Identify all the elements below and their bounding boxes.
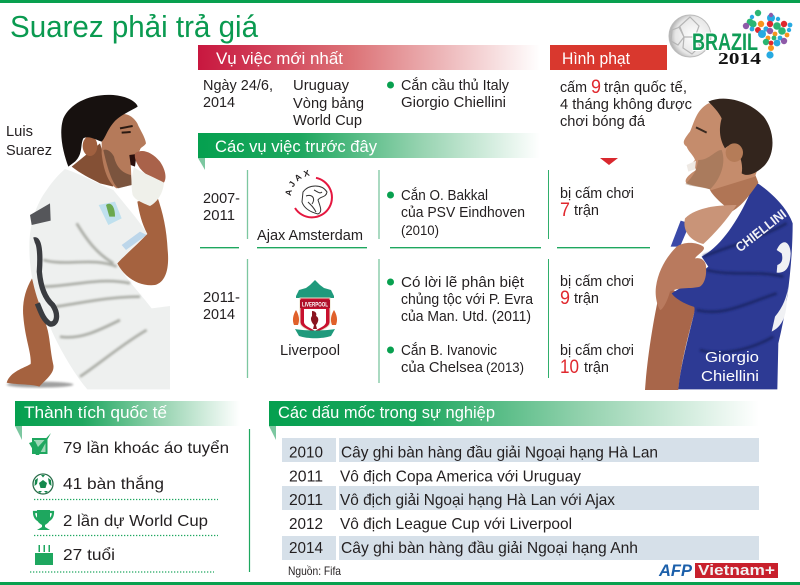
logo: Brazil 2014: 2014 (718, 49, 762, 68)
penalty: 7 matches (560, 185, 634, 221)
row: 2011 Ajax: 2011 (289, 492, 323, 509)
top green bar (0, 0, 800, 3)
row: 2011-2014 years: 2011- (203, 289, 240, 306)
logo: Liverpool: LIVERPOOL (302, 302, 328, 308)
label: Giorgio Chiellini: Chiellini (701, 368, 759, 385)
beard (103, 150, 132, 188)
shirt name (30, 203, 51, 225)
stat: age: 27 tuổi (63, 546, 115, 564)
row: 2014: Cây ghi bàn hàng đầu giải Ngoại hạng Anh (341, 540, 638, 557)
neck (710, 170, 758, 212)
stat: goals: 41 bàn thắng (63, 474, 164, 493)
shoulder (684, 205, 737, 244)
photo: Luis Suarez (7, 95, 170, 389)
label: Luis Suarez (6, 123, 52, 159)
incident: Ivanovic: của Chelsea (401, 359, 484, 376)
incident: Ivanovic: Cắn B. Ivanovic (401, 342, 497, 359)
shadow under hand (7, 382, 73, 388)
row: 2007-2011 years (203, 190, 240, 224)
shirt number (34, 240, 57, 324)
header: previous incidents: Các vụ việc trước đây (215, 137, 377, 156)
latest incident: penalty: cấm (560, 79, 587, 96)
icon: cake (35, 545, 53, 565)
header: penalty (550, 45, 667, 70)
logo: Brazil 2014 (669, 10, 792, 68)
row: 2010: 2010 (289, 444, 323, 462)
shirt (29, 169, 170, 389)
incident: Ivanovic: (2013) (486, 360, 524, 375)
label: Luis Suarez: Suarez (6, 142, 52, 159)
label: Luis Suarez: Luis (6, 123, 33, 140)
latest incident: description (387, 77, 509, 111)
penalty: 7 matches: bị cấm chơi (560, 185, 634, 202)
sleeve badge (99, 202, 122, 225)
logo: Vietnam+: Vietnam+ (698, 563, 775, 579)
shirt shading (43, 223, 147, 377)
latest incident: penalty: 4 tháng không được (560, 96, 692, 113)
ear (83, 136, 97, 156)
lower arm (645, 290, 697, 390)
latest incident: match (293, 77, 364, 129)
ear (726, 143, 743, 162)
hand (135, 151, 166, 183)
stat: caps: 79 lần khoác áo tuyển (63, 439, 229, 457)
sleeve (671, 221, 690, 247)
neck (72, 143, 113, 187)
penalty: 7 matches: 7 (560, 200, 570, 221)
logo: Liverpool (293, 280, 337, 338)
stat: World Cup: 2 lần dự World Cup (63, 513, 208, 530)
label: Giorgio Chiellini: Giorgio (705, 349, 759, 366)
latest incident: date: Ngày 24/6, (203, 77, 273, 94)
row: 2011 Copa America: 2011 (289, 468, 323, 486)
row: 2010: Cây ghi bàn hàng đầu giải Ngoại hạng Hà Lan (341, 444, 658, 462)
heading: Các dấu mốc trong sự nghiệp (278, 403, 495, 422)
penalty: 10 matches: 10 (560, 357, 579, 378)
row: 2014 (282, 536, 759, 560)
hand on shirt (656, 243, 706, 310)
arrow: penalty marker (600, 158, 618, 165)
header: latest incident: Vụ việc mới nhất (216, 49, 343, 68)
eye and brow (120, 126, 133, 133)
row: 2011-2014 years: 2014 (203, 306, 235, 323)
row: 2012: 2012 (289, 516, 323, 533)
row: 2012: Vô địch League Cup với Liverpool (340, 516, 572, 533)
latest incident: date (203, 77, 273, 111)
label: Giorgio Chiellini (701, 349, 759, 385)
label: Liverpool: Liverpool (280, 342, 340, 359)
incident: Evra: chủng tộc với P. Evra (401, 291, 534, 308)
row: 2007-2011 years: 2011 (203, 207, 235, 224)
penalty: 10 matches (560, 342, 634, 378)
heading (15, 401, 240, 440)
row: 2007-2011 years: 2007- (203, 190, 240, 207)
panel: international record (15, 401, 240, 572)
panel: career milestones (269, 401, 759, 560)
bottom green bar (0, 582, 800, 585)
heading: Thành tích quốc tế (24, 403, 168, 422)
row: 2010 (282, 438, 759, 462)
row: 2011 Copa America: Vô địch Copa America với Uruguay (340, 468, 581, 486)
latest incident: match: World Cup (293, 112, 362, 129)
heading (269, 401, 759, 440)
latest incident: description: Giorgio Chiellini (401, 94, 506, 111)
logo: Ajax (286, 170, 333, 218)
penalty: 10 matches: bị cấm chơi (560, 342, 634, 359)
penalty: 10 matches: trận (584, 359, 609, 376)
incident: Bakkal: (2010) (401, 223, 439, 238)
bandage (132, 167, 164, 206)
sleeve band (122, 232, 147, 250)
row: 2011-2014 years (203, 289, 240, 323)
logo: AFP: AFP (658, 561, 693, 580)
stubble (685, 150, 723, 189)
penalty: 9 matches (560, 273, 634, 309)
penalty: 9 matches: 9 (560, 288, 570, 309)
hair (708, 99, 772, 175)
eye (696, 127, 707, 133)
shirt number (772, 242, 791, 332)
title: Suarez phải trả giá (10, 9, 259, 44)
blue shirt (672, 183, 793, 389)
incident: Evra: Có lời lẽ phân biệt (401, 274, 525, 291)
latest incident: penalty (560, 77, 692, 130)
icon: check box (29, 433, 51, 455)
latest incident: penalty: 9 (591, 77, 601, 98)
row: 2011 Ajax (282, 486, 759, 510)
forearm (117, 195, 168, 285)
header: penalty: Hình phạt (562, 49, 630, 68)
penalty: 7 matches: trận (574, 202, 599, 219)
latest incident: penalty: trận quốc tế, (604, 79, 687, 96)
incident: Bakkal (387, 187, 525, 238)
incident: Evra: của Man. Utd. (2011) (401, 308, 531, 325)
back arm (7, 278, 54, 387)
incident: Bakkal: Cắn O. Bakkal (401, 187, 488, 204)
label: Ajax Amsterdam: Ajax Amsterdam (257, 227, 363, 244)
incident: Bakkal: của PSV Eindhoven (401, 204, 525, 221)
photo: Giorgio Chiellini (645, 99, 793, 390)
face (102, 114, 146, 188)
latest incident: date: 2014 (203, 94, 235, 111)
logo: Ajax: AJAX (286, 170, 310, 196)
penalty: 9 matches: trận (574, 290, 599, 307)
incident: Ivanovic (387, 342, 524, 376)
mouth (687, 161, 696, 172)
mouth (129, 154, 137, 167)
penalty: 9 matches: bị cấm chơi (560, 273, 634, 290)
shirt shadow folds (697, 223, 787, 353)
icon: football (33, 474, 53, 494)
latest incident: match: Vòng bảng (293, 95, 364, 112)
latest incident: description: Cắn cầu thủ Italy (401, 77, 509, 94)
table rules (200, 170, 650, 383)
logo: Brazil 2014: BRAZIL (692, 29, 758, 56)
source note: Nguồn: Fifa (288, 564, 341, 578)
latest incident: match: Uruguay (293, 77, 349, 94)
incident: Evra (387, 274, 534, 325)
header: previous incidents (198, 133, 540, 170)
row: 2014: 2014 (289, 540, 323, 557)
head (684, 103, 758, 190)
latest incident: penalty: chơi bóng đá (560, 113, 646, 130)
row: 2011 Ajax: Vô địch giải Ngoại hạng Hà Lan với Ajax (340, 492, 615, 509)
header: latest incident (198, 45, 540, 70)
icon: trophy (34, 510, 53, 530)
hair (61, 95, 138, 167)
shirt name: CHIELLINI (733, 206, 789, 255)
